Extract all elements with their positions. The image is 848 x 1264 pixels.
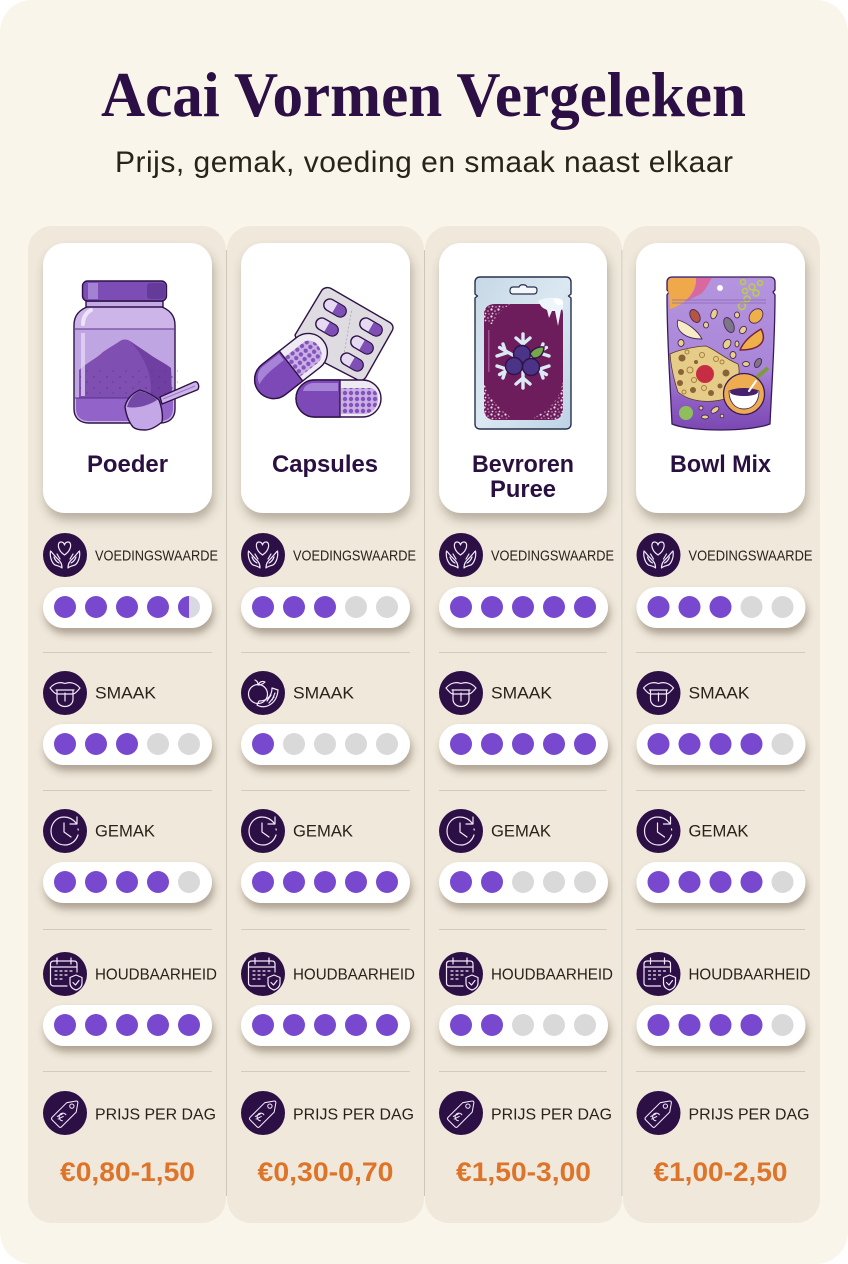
label: SMAAK [688,684,750,702]
row: smaak [439,671,608,765]
rating pill: 3 of 5 [241,587,410,628]
product name: Capsules [272,451,378,478]
illustration: bowl mix pouch [667,277,775,430]
rating pill: 3 of 5 [636,587,806,628]
label: SMAAK [491,684,552,702]
icon: hands with heart [43,533,87,577]
product card: Poeder [43,243,212,513]
product name second line: Puree [490,476,556,503]
price: €1,50-3,00 [456,1157,591,1187]
label: VOEDINGSWAARDE [293,548,416,564]
rating pill: 5 of 5 [43,1005,212,1046]
rating pill: 4 of 5 [636,1005,806,1046]
row: gemak [636,809,806,903]
row: gemak [43,809,212,903]
label: VOEDINGSWAARDE [95,548,218,564]
icon: calendar with shield [241,952,285,996]
rating pill: 2 of 5 [439,862,608,903]
row: prijs per dag [241,1091,414,1187]
price: €0,80-1,50 [60,1157,195,1187]
label: VOEDINGSWAARDE [491,548,614,564]
row: prijs per dag [43,1091,216,1187]
icon: hands with heart [241,533,285,577]
icon: clock [241,809,285,853]
rating pill: 3 of 5 [43,724,212,765]
rating pill: 5 of 5 [241,862,410,903]
illustration: capsules and blister pack [247,288,393,417]
subtitle: Prijs, gemak, voeding en smaak naast elkaar [115,146,733,179]
icon: calendar with shield [636,952,680,996]
label: PRIJS PER DAG [95,1106,216,1124]
icon: price tag [439,1091,483,1135]
icon: hands with heart [439,533,483,577]
icon: tongue [43,671,87,715]
illustration: frozen puree pouch [475,277,571,429]
label: SMAAK [95,684,156,702]
row: prijs per dag [439,1091,612,1187]
rating pill: 2 of 5 [439,1005,608,1046]
icon: price tag [636,1091,680,1135]
rating pill: 4 of 5 [43,862,212,903]
row: gemak [439,809,608,903]
label: GEMAK [491,822,551,840]
icon: price tag [43,1091,87,1135]
label: GEMAK [688,822,748,840]
row: houdbaarheid [241,952,415,1046]
rating pill: 5 of 5 [439,587,608,628]
icon: fruit [241,671,285,715]
rating pill: 4 of 5 [636,862,806,903]
label: HOUDBAARHEID [491,966,613,984]
label: GEMAK [95,822,155,840]
panel: Bowl Mix [623,226,820,1223]
rating pill: 1 of 5 [241,724,410,765]
row: voedingswaarde [636,533,812,628]
label: GEMAK [293,822,353,840]
icon: clock [439,809,483,853]
product card: Bowl Mix [636,243,805,513]
icon: tongue [636,671,680,715]
icon: hands with heart [636,533,680,577]
rating pill: 4 of 5 [636,724,806,765]
panel: Capsules [227,226,424,1223]
price: €0,30-0,70 [258,1157,394,1187]
row: houdbaarheid [439,952,613,1046]
row: smaak [636,671,806,765]
icon: tongue [439,671,483,715]
label: PRIJS PER DAG [293,1106,414,1124]
row: prijs per dag [636,1091,810,1187]
icon: clock [43,809,87,853]
rating pill: 5 of 5 [241,1005,410,1046]
row: houdbaarheid [636,952,810,1046]
price: €1,00-2,50 [654,1157,788,1187]
product name: Bowl Mix [670,451,772,478]
row: houdbaarheid [43,952,217,1046]
rating pill: 5 of 5 [439,724,608,765]
product name: Bevroren [472,451,574,478]
label: PRIJS PER DAG [688,1106,810,1124]
label: SMAAK [293,684,354,702]
rating pill: 4.5 of 5 [43,587,212,628]
icon: calendar with shield [43,952,87,996]
panel: Bevroren Puree [425,226,622,1223]
row: smaak [43,671,212,765]
label: HOUDBAARHEID [95,966,217,984]
icon: calendar with shield [439,952,483,996]
row: gemak [241,809,410,903]
product name: Poeder [87,451,168,478]
row: voedingswaarde [439,533,614,628]
panel: Poeder [28,226,226,1223]
label: VOEDINGSWAARDE [688,548,812,564]
row: smaak [241,671,410,765]
product card: Bevroren Puree [439,243,607,513]
icon: clock [636,809,680,853]
row: voedingswaarde [241,533,416,628]
row: voedingswaarde [43,533,218,628]
icon: price tag [241,1091,285,1135]
illustration: powder jar with scoop [74,281,199,430]
product card: Capsules [241,243,410,513]
label: HOUDBAARHEID [293,966,415,984]
title: Acai Vormen Vergeleken [101,59,746,130]
label: PRIJS PER DAG [491,1106,612,1124]
label: HOUDBAARHEID [688,966,810,984]
